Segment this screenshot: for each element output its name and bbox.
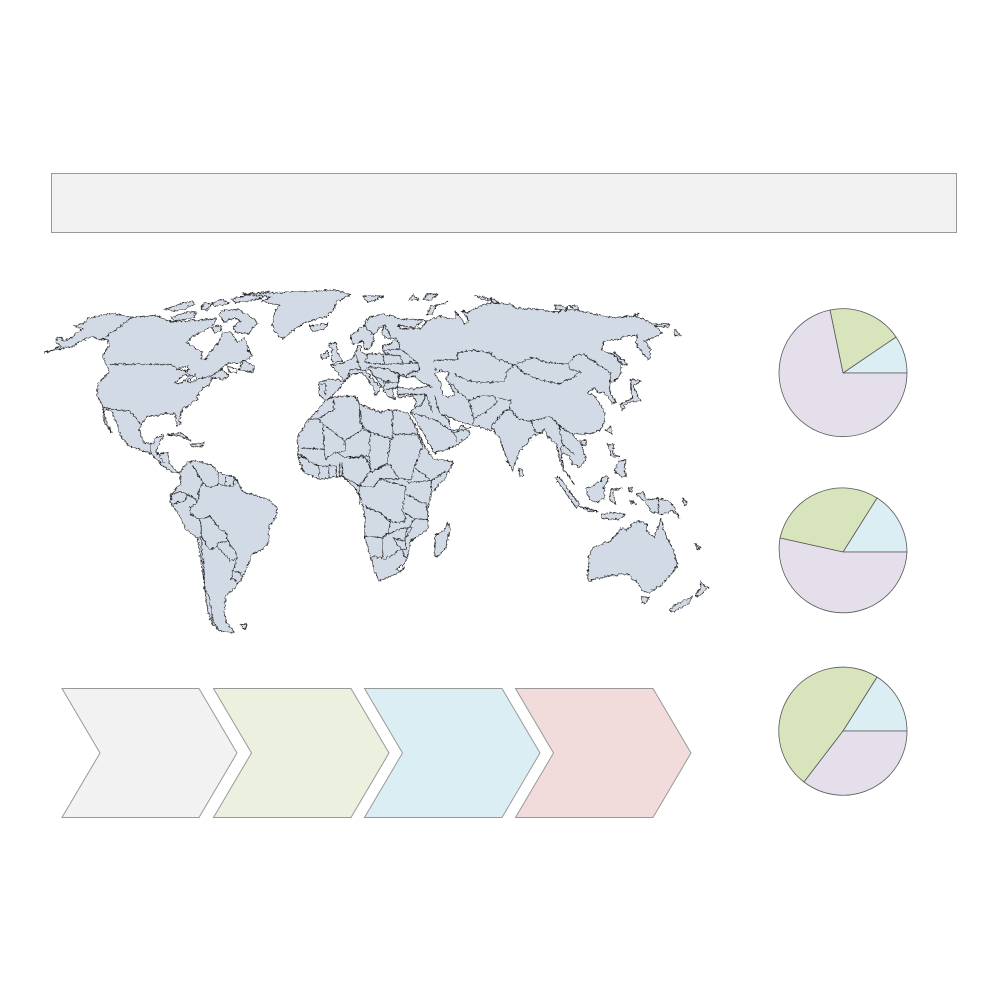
sulawesi xyxy=(608,487,622,503)
uk xyxy=(328,342,342,362)
newfoundland xyxy=(238,360,253,372)
eurasia xyxy=(318,292,680,483)
arctic russian islands xyxy=(407,292,680,334)
north america xyxy=(43,289,350,472)
java xyxy=(578,505,597,511)
world map xyxy=(43,289,708,632)
borneo xyxy=(585,475,608,502)
chevron 1 xyxy=(62,688,237,818)
chevron 2 xyxy=(214,688,389,818)
australia xyxy=(587,518,677,592)
taiwan xyxy=(605,425,611,433)
pie chart 1 xyxy=(779,309,907,437)
pie chart 2 xyxy=(779,488,907,613)
south america xyxy=(170,459,276,632)
caribbean islands xyxy=(167,432,203,445)
sakhalin xyxy=(613,352,627,363)
greenland xyxy=(242,289,350,338)
new caledonia xyxy=(694,543,700,548)
sumatra xyxy=(554,476,578,507)
new guinea xyxy=(635,492,678,517)
tasmania xyxy=(641,596,648,603)
arctic islands xyxy=(163,290,268,333)
sri lanka xyxy=(517,467,523,475)
falkland islands xyxy=(241,623,246,628)
chevron 3 xyxy=(364,688,540,818)
japan xyxy=(619,378,640,410)
inland seas xyxy=(397,320,453,397)
svalbard xyxy=(362,295,383,301)
chevron 4 xyxy=(516,688,691,818)
title banner xyxy=(52,174,956,232)
madagascar xyxy=(433,522,449,556)
iceland xyxy=(308,323,327,330)
africa xyxy=(297,395,452,580)
small indonesian islands xyxy=(600,487,687,518)
chevron process steps xyxy=(62,688,691,818)
pie chart 3 xyxy=(779,667,907,795)
new zealand xyxy=(668,580,708,611)
ireland xyxy=(319,350,328,358)
hainan xyxy=(580,438,585,445)
southeast asia and oceania xyxy=(554,443,708,611)
philippines xyxy=(607,443,625,476)
